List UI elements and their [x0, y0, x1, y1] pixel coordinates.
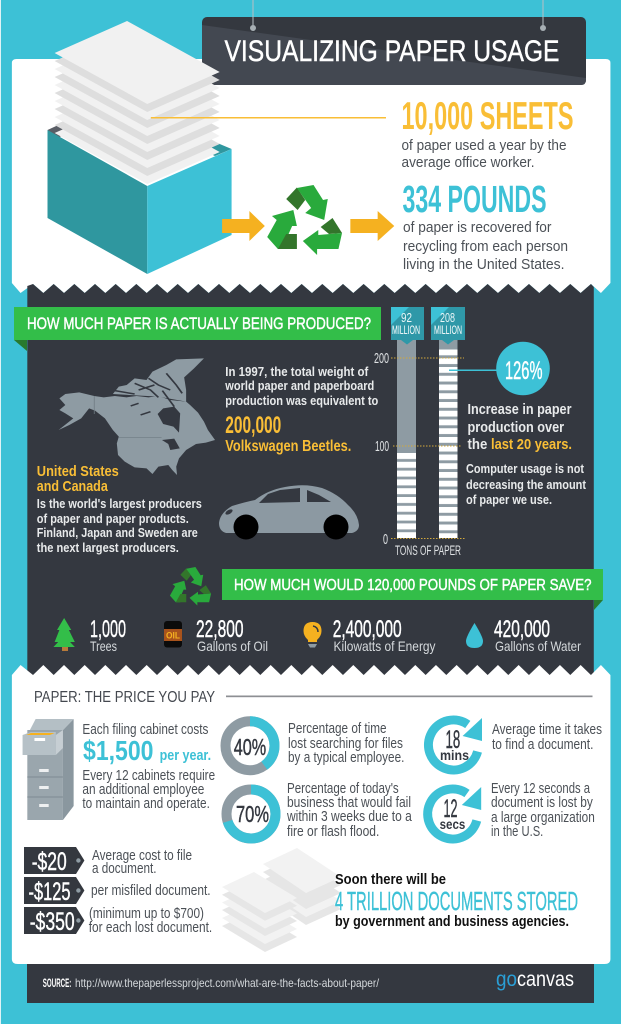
text: filing cabinet cost: an additional employee [82, 782, 204, 798]
bar: 92 million: MILLION [392, 325, 420, 337]
heading banner: paper production: HOW MUCH PAPER IS ACTUALLY BEING PRODUCED? [27, 314, 371, 333]
text: document lost [491, 781, 595, 840]
stat: water: Gallons of Water [495, 638, 581, 654]
panel: bottom white paper [12, 665, 610, 964]
logo: canvas [517, 968, 574, 991]
text: cost to file: Average cost to file [92, 848, 192, 864]
bar: 92 million: 92 [401, 310, 412, 325]
text: time to find: to find a document. [492, 737, 593, 753]
stat: 334 pounds: living in the United States. [403, 256, 564, 273]
price tag: $125: -$125 [28, 878, 70, 906]
text: United States and Canada: and Canada [37, 478, 108, 495]
timer: 18 mins [428, 718, 482, 770]
icon: small recycling [170, 567, 211, 606]
stat: water: 420,000 [494, 616, 550, 643]
text: increase in production: Computer usage is not [466, 461, 585, 476]
text: 70% explanation: business that would fail [287, 795, 411, 811]
text: lost document: for each lost document. [89, 920, 212, 936]
stat: energy: 2,400,000 [333, 616, 402, 643]
bar: 208 million [431, 307, 465, 538]
stat: energy [304, 616, 436, 654]
text: 40% explanation: Percentage of time [288, 721, 387, 737]
callout: 126%: 126% [505, 357, 542, 385]
text: increase in production: the [468, 436, 487, 453]
text: time to find [492, 722, 602, 753]
text: filing cabinet cost: Every 12 cabinets require [82, 768, 215, 784]
icon: Volkswagen Beetle [219, 485, 359, 540]
stat: oil: OIL [166, 630, 180, 640]
callout: 4 trillion documents [335, 871, 578, 930]
timer: 12 secs: 12 [444, 795, 458, 823]
icon: filing cabinet [23, 719, 74, 820]
axis labels [374, 350, 461, 558]
stat: 334 pounds: of paper is recovered for [403, 219, 552, 236]
stat: 10,000 sheets: of paper used a year by the [402, 137, 566, 154]
text: United States and Canada: Finland, Japan and Sweden are [37, 525, 198, 540]
map: North America [59, 358, 215, 475]
heading banner: paper production [14, 307, 381, 351]
axis labels: TONS OF PAPER [395, 542, 461, 558]
donut chart: 40% [226, 721, 274, 770]
axis labels: 100 [375, 438, 389, 455]
text: document lost: document is lost by [491, 795, 593, 811]
heading: the price you pay: PAPER: THE PRICE YOU PAY [34, 689, 215, 706]
text: increase in production: Increase in paper [468, 401, 572, 418]
text: Volkswagen comparison: Volkswagen Beetles. [225, 438, 351, 455]
axis labels: 200 [374, 350, 389, 367]
text: cost to file [92, 848, 192, 877]
stat: trees [53, 616, 126, 654]
text: document lost: in the U.S. [491, 824, 543, 840]
axis labels: 0 [383, 531, 388, 548]
title banner [202, 0, 586, 85]
title: VISUALIZING PAPER USAGE [224, 35, 560, 68]
logo [496, 968, 574, 991]
text: increase in production: decreasing the amount [466, 477, 587, 492]
illustration: box of paper [48, 21, 386, 274]
text: Volkswagen comparison [224, 364, 378, 455]
logo: go [496, 968, 517, 991]
icon: recycling [267, 185, 342, 255]
text: increase in production: production over [468, 419, 564, 436]
stat: 10,000 sheets [402, 95, 574, 171]
text: 70% explanation: fire or flash flood. [287, 824, 379, 840]
text: lost document [89, 906, 212, 936]
stat: 334 pounds: recycling from each person [403, 238, 568, 255]
text: document lost: Every 12 seconds a [491, 781, 591, 797]
timer: 18 mins: mins [440, 747, 469, 763]
stat: oil [164, 616, 268, 654]
footer [27, 964, 594, 1003]
text: Volkswagen comparison: 200,000 [225, 412, 281, 439]
text: filing cabinet cost: $1,500 [83, 735, 154, 766]
price tag: $350: -$350 [30, 908, 75, 936]
stat: oil: Gallons of Oil [197, 638, 268, 654]
text: misfiled: per misfiled document. [91, 883, 211, 899]
text: 40% explanation: by a typical employee. [288, 750, 404, 766]
text: filing cabinet cost: to maintain and operate. [82, 796, 210, 812]
text: Volkswagen comparison: world paper and paperboard [224, 378, 374, 393]
text: 70% explanation: Percentage of today's [287, 781, 399, 797]
bar: 208 million: MILLION [434, 325, 462, 337]
text: United States and Canada: the next largest producers. [37, 540, 179, 555]
illustration: paper stacks [222, 848, 341, 952]
stat: oil: 22,800 [196, 616, 244, 643]
text: filing cabinet cost [82, 722, 215, 812]
timer: 12 secs: secs [440, 816, 465, 832]
text: Volkswagen comparison: In 1997, the total weight of [225, 364, 369, 379]
text: Volkswagen comparison: production was equivalent to [225, 393, 378, 408]
callout: 4 trillion documents: by government and business agencies. [335, 913, 569, 930]
callout: 4 trillion documents: Soon there will be [335, 871, 446, 888]
bar: 92 million [391, 307, 424, 538]
stat: trees: Trees [90, 638, 117, 654]
text: increase in production [466, 401, 587, 507]
stat: trees: 1,000 [90, 616, 126, 643]
text: United States and Canada [37, 463, 202, 555]
text: 40% explanation [288, 721, 404, 766]
source url: http://www.thepaperlessproject.com/what-are-the-facts-about-paper/ [75, 976, 380, 990]
timer: 12 secs [428, 787, 481, 839]
bar: 208 million: 208 [440, 310, 455, 325]
arrow: box to recycling [222, 211, 265, 241]
text: lost document: (minimum up to $700) [89, 906, 204, 922]
text: 70% explanation: within 3 weeks due to a [286, 809, 413, 825]
bar chart: tons of paper [374, 307, 466, 558]
donut chart: 70%: 70% [236, 801, 269, 827]
donut chart: 40%: 40% [234, 734, 266, 760]
text: document lost: a large organization [491, 810, 595, 826]
text: United States and Canada: of paper and paper products. [37, 511, 189, 526]
stat: water [466, 616, 581, 654]
text: increase in production: last 20 years. [491, 436, 572, 453]
text: cost to file: a document. [92, 861, 156, 877]
text: filing cabinet cost: Each filing cabinet costs [82, 722, 208, 738]
text: 40% explanation: lost searching for files [288, 736, 403, 752]
callout: 126% [449, 342, 550, 395]
panel: top white paper [12, 59, 610, 293]
donut chart: 70% [226, 790, 276, 838]
stat: 334 pounds [402, 179, 568, 273]
text: filing cabinet cost: per year. [160, 747, 211, 764]
panel: dark production section [27, 284, 594, 680]
text: 70% explanation [286, 781, 413, 840]
stat: 10,000 sheets: average office worker. [402, 154, 534, 171]
source: SOURCE: [43, 978, 71, 990]
price tag: $20: -$20 [32, 848, 67, 876]
text: increase in production: of paper we use. [466, 492, 552, 507]
stat: energy: Kilowatts of Energy [334, 638, 436, 654]
arrow: recycling to stat [350, 211, 394, 241]
timer: 18 mins: 18 [446, 726, 460, 754]
text: United States and Canada: Is the world's largest producers [37, 496, 202, 511]
heading banner: paper savings [222, 569, 603, 610]
text: United States and Canada: United States [37, 463, 119, 480]
